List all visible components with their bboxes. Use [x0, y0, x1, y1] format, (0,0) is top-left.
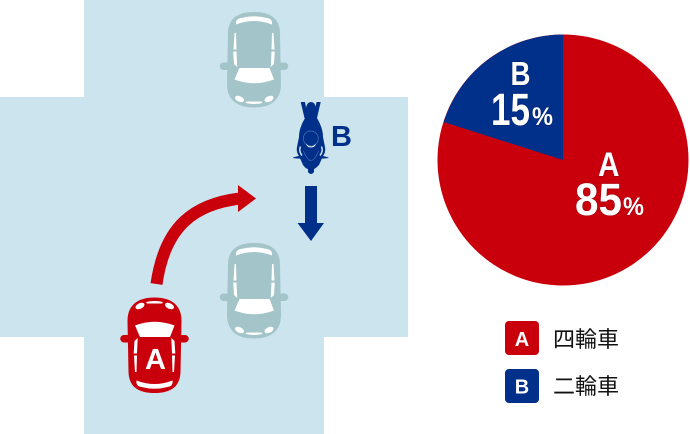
pie slice A 85%	[438, 34, 688, 286]
pie label B 15%: B	[510, 55, 530, 92]
intersection road	[0, 0, 408, 434]
red car A	[120, 298, 189, 393]
pie slice B 15%	[444, 34, 563, 160]
legend item A: A	[515, 329, 529, 351]
pie label A 85%	[575, 146, 644, 225]
motorcycle B	[293, 102, 328, 174]
grey car, bottom	[220, 243, 288, 338]
grey car, top	[220, 12, 288, 108]
pie chart	[438, 34, 688, 286]
legend item B: B	[515, 376, 529, 398]
car label A: A	[145, 344, 166, 376]
pie label B 15%	[491, 55, 553, 135]
pie label B 15%: %	[532, 103, 553, 131]
legend item A	[505, 321, 619, 355]
pie label B 15%: 15	[491, 84, 530, 135]
legend item A: 四輪車	[553, 327, 619, 352]
legend item B	[505, 369, 619, 403]
red turning arrow	[156, 185, 256, 284]
label B: B	[331, 121, 352, 153]
pie label A 85%: 85	[575, 174, 622, 225]
pie label A 85%: A	[598, 146, 620, 184]
blue straight arrow	[298, 186, 324, 241]
legend item B: 二輪車	[553, 374, 619, 399]
pie label A 85%: %	[623, 193, 644, 221]
